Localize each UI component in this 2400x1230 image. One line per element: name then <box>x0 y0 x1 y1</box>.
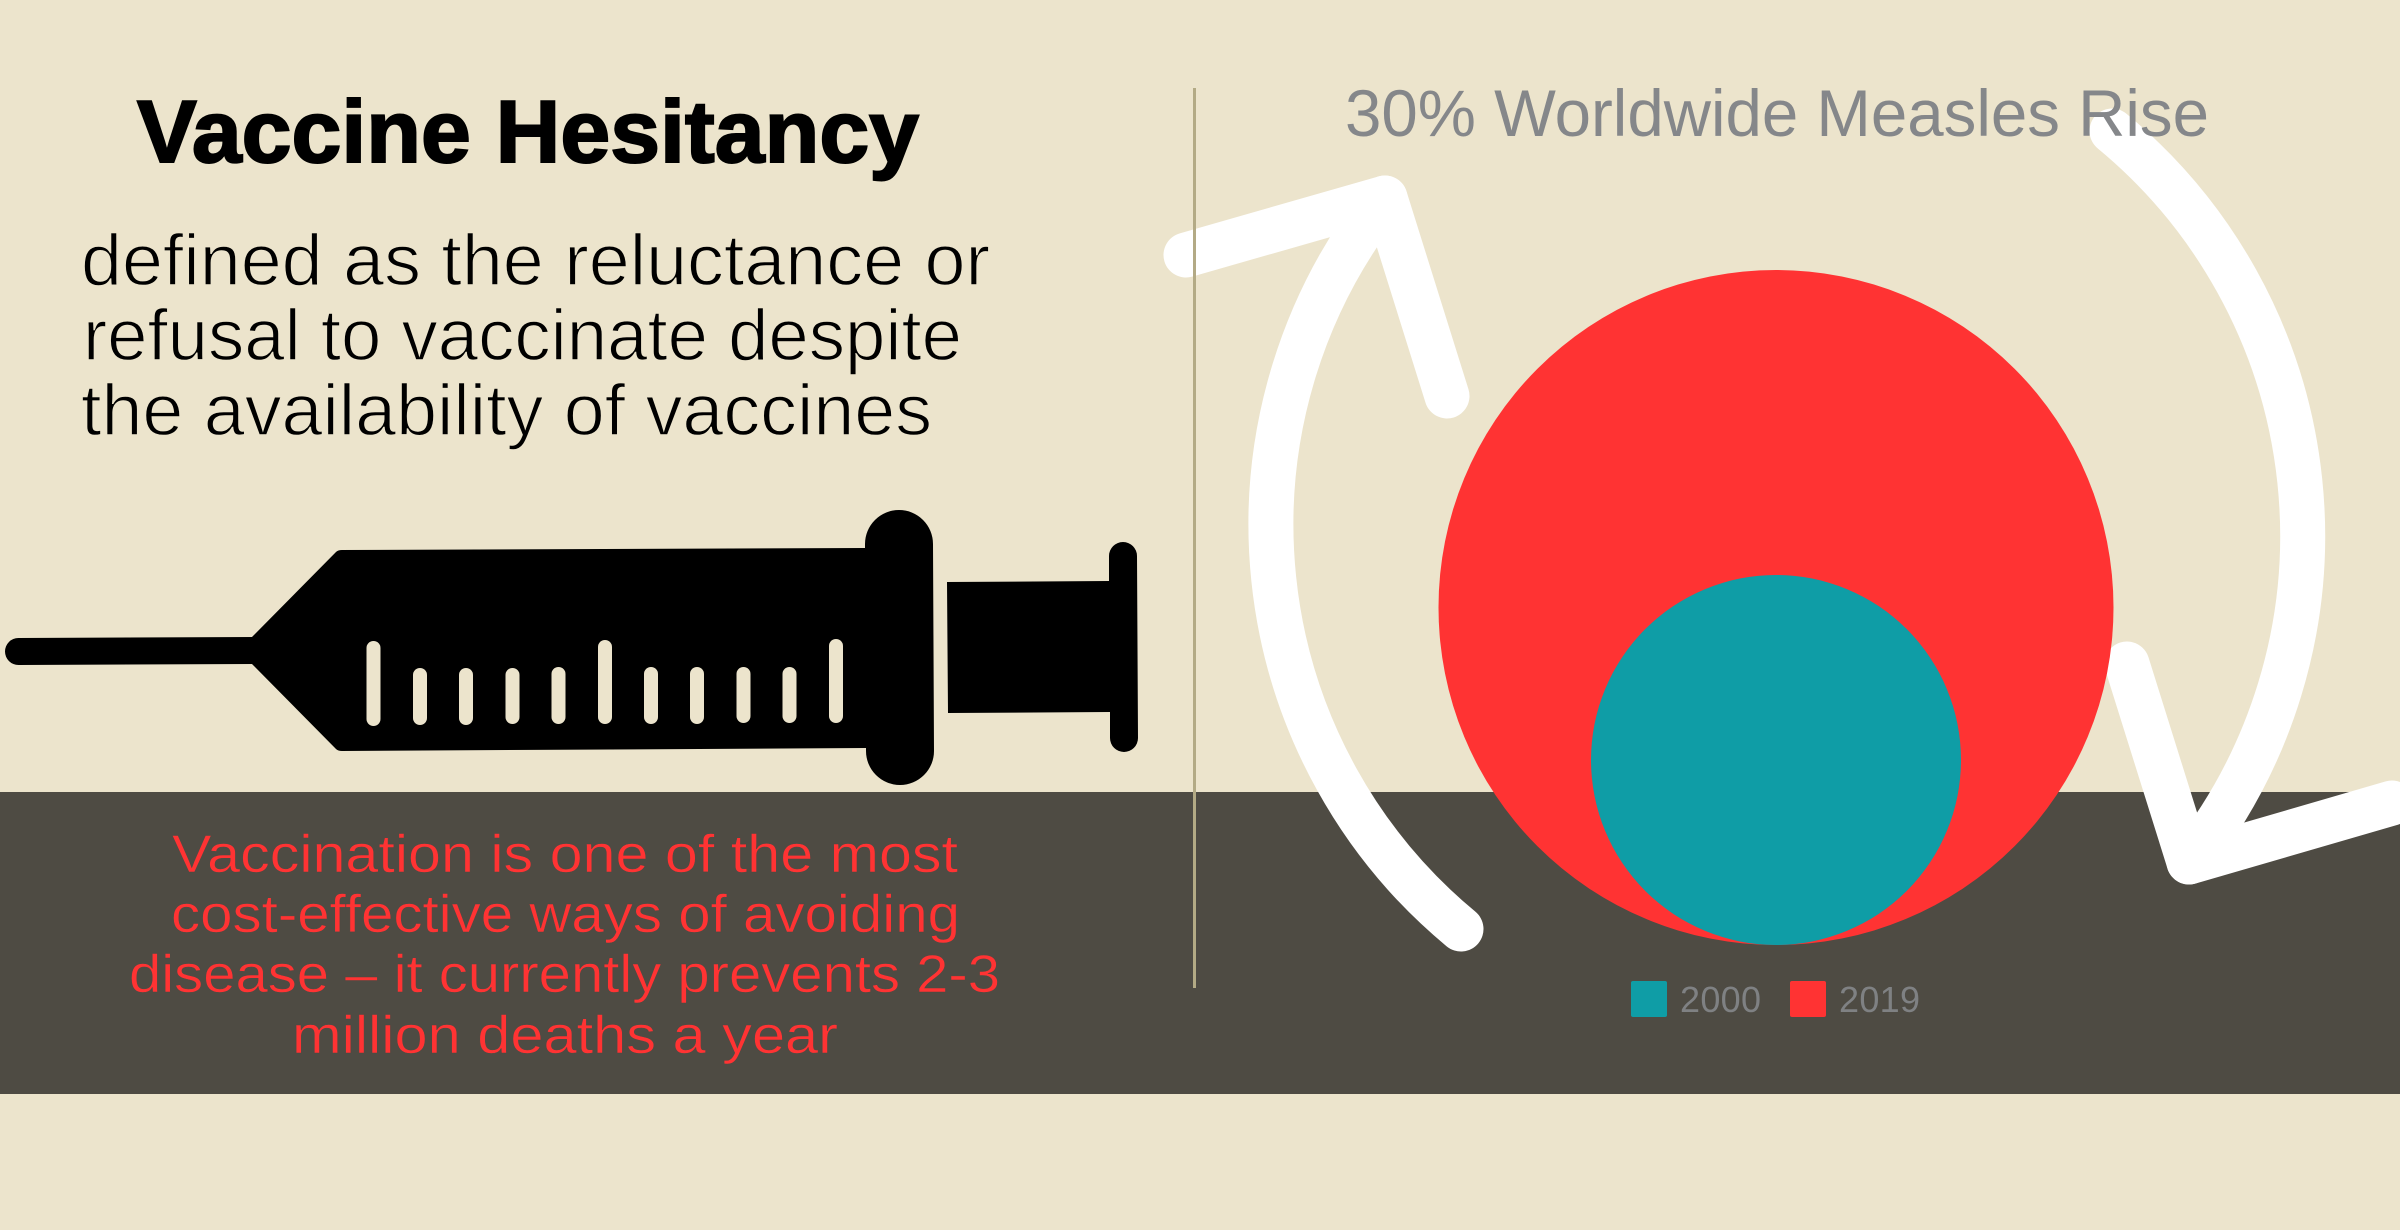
red statement text: Vaccination is one of the most <box>172 825 958 884</box>
bubble: 2019 <box>1438 270 2114 945</box>
icon: syringe <box>18 510 1138 785</box>
chart heading: 30% Worldwide Measles Rise <box>1345 76 2209 150</box>
syringe ticks <box>374 646 836 719</box>
circular arrow: right <box>2112 131 2392 862</box>
bubble chart <box>1438 270 2114 945</box>
bubble: 2000 <box>1591 575 1961 945</box>
legend: 2019: 2019 <box>1839 979 1920 1020</box>
circular arrow: left <box>1186 198 1461 929</box>
dark band <box>0 792 2400 1094</box>
red statement text: cost-effective ways of avoiding <box>171 885 960 944</box>
syringe barrel <box>252 510 934 785</box>
legend: 2019 <box>1790 979 1920 1020</box>
red statement text <box>129 825 1000 1065</box>
legend <box>1631 979 1920 1020</box>
syringe needle <box>18 650 255 652</box>
definition text <box>81 221 990 451</box>
red statement text: disease – it currently prevents 2-3 <box>129 945 1000 1004</box>
title: Vaccine Hesitancy <box>137 82 919 181</box>
definition text: the availability of vaccines <box>81 371 932 451</box>
legend: 2000 <box>1631 979 1761 1020</box>
syringe plunger <box>947 542 1138 752</box>
definition text: refusal to vaccinate despite <box>83 296 962 376</box>
red statement text: million deaths a year <box>292 1006 838 1065</box>
legend: 2000: 2000 <box>1680 979 1761 1020</box>
definition text: defined as the reluctance or <box>81 221 990 301</box>
